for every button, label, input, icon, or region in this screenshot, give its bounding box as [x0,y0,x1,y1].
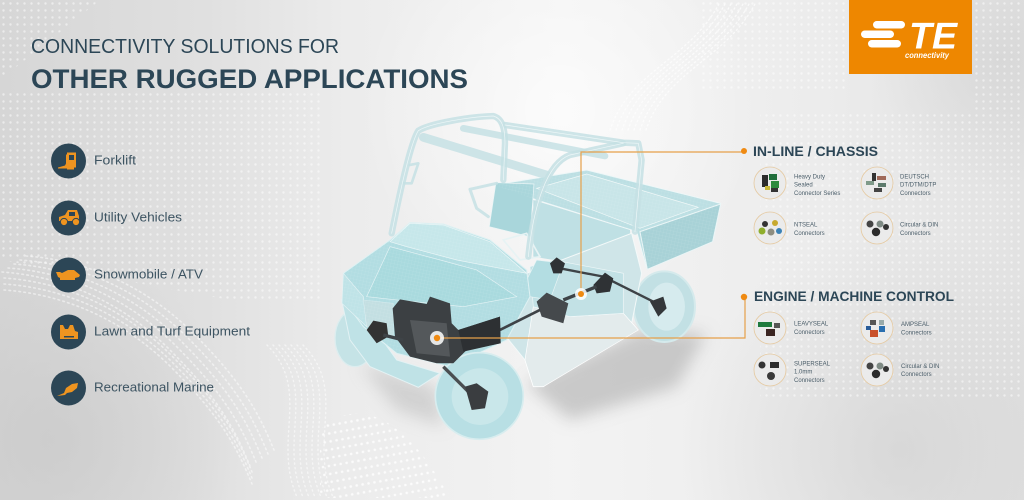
connector: deutsch: DEUTSCH [900,174,929,180]
connector: superseal: 1.0mm [794,370,812,376]
callout line: engine / machine control [430,294,747,345]
item: lawn and turf [51,314,251,350]
item: lawn and turf: Lawn and Turf Equipment [94,324,251,338]
cargo bed [489,170,721,273]
connector: heavy duty sealed: Sealed [794,182,813,188]
connector: leavyseal: Connectors [794,330,825,336]
connector: ampseal [861,312,932,344]
connector: deutsch: DT/DTM/DTP [900,182,936,188]
side panel and door [503,233,642,387]
connector: circular and din: Circular & DIN [901,364,939,370]
logo: TE connectivity: TE [909,16,958,56]
panel: in-line / chassis [753,144,938,244]
connector: circular and din: Connectors [900,231,931,237]
connector: ampseal: AMPSEAL [901,322,930,328]
vehicle illustration [335,116,721,439]
applications list [51,144,251,406]
wave bundle centre [267,345,333,497]
front wheel [435,353,523,439]
item: utility vehicles [51,200,182,236]
panel: engine / machine control [754,289,954,386]
connector: circular and din [861,212,938,244]
connector: ampseal: Connectors [901,330,932,336]
connector: superseal [754,354,831,386]
item: forklift: Forklift [94,154,137,168]
connector: heavy duty sealed [754,167,840,199]
ground shadow [360,330,707,427]
title [31,35,468,94]
item: recreational marine: Recreational Marine [94,380,214,394]
callout line: in-line / chassis [575,148,747,300]
connector: circular and din [861,354,939,386]
heading: IN-LINE / CHASSIS [753,144,878,159]
connector: ntseal [754,212,825,244]
item: utility vehicles: Utility Vehicles [94,210,182,224]
logo: TE connectivity [849,0,972,74]
item: snowmobile: Snowmobile / ATV [94,268,204,282]
connector: circular and din: Circular & DIN [900,222,938,228]
front lower fender [342,300,440,387]
connector: deutsch: Connectors [900,191,931,197]
connector: superseal: SUPERSEAL [794,362,831,368]
drivetrain: rear axle [550,257,667,317]
title: CONNECTIVITY SOLUTIONS FOR [31,35,339,58]
logo: TE connectivity: connectivity [905,51,950,60]
connector: heavy duty sealed: Connector Series [794,191,840,197]
wave bundle left [2,256,274,484]
seat base and steering [503,233,563,300]
item: snowmobile [51,258,204,292]
rear right wheel [634,271,695,342]
connector: ntseal: Connectors [794,231,825,237]
roll cage [392,116,642,257]
front left wheel [335,310,375,367]
connector: circular and din: Connectors [901,372,932,378]
wave bundle top [610,2,756,130]
connector: heavy duty sealed: Heavy Duty [794,174,825,180]
hood and front body [342,223,530,367]
drivetrain: engine block [367,297,501,363]
title: OTHER RUGGED APPLICATIONS [31,64,468,94]
drivetrain: transmission [500,293,568,330]
heading: ENGINE / MACHINE CONTROL [754,289,954,304]
connector: superseal: Connectors [794,378,825,384]
connector: ntseal: NTSEAL [794,222,818,228]
connector: deutsch [861,167,936,199]
connector: leavyseal: LEAVYSEAL [794,322,829,328]
connector: leavyseal [754,312,829,344]
item: recreational marine [51,370,214,406]
item: forklift [51,144,137,178]
